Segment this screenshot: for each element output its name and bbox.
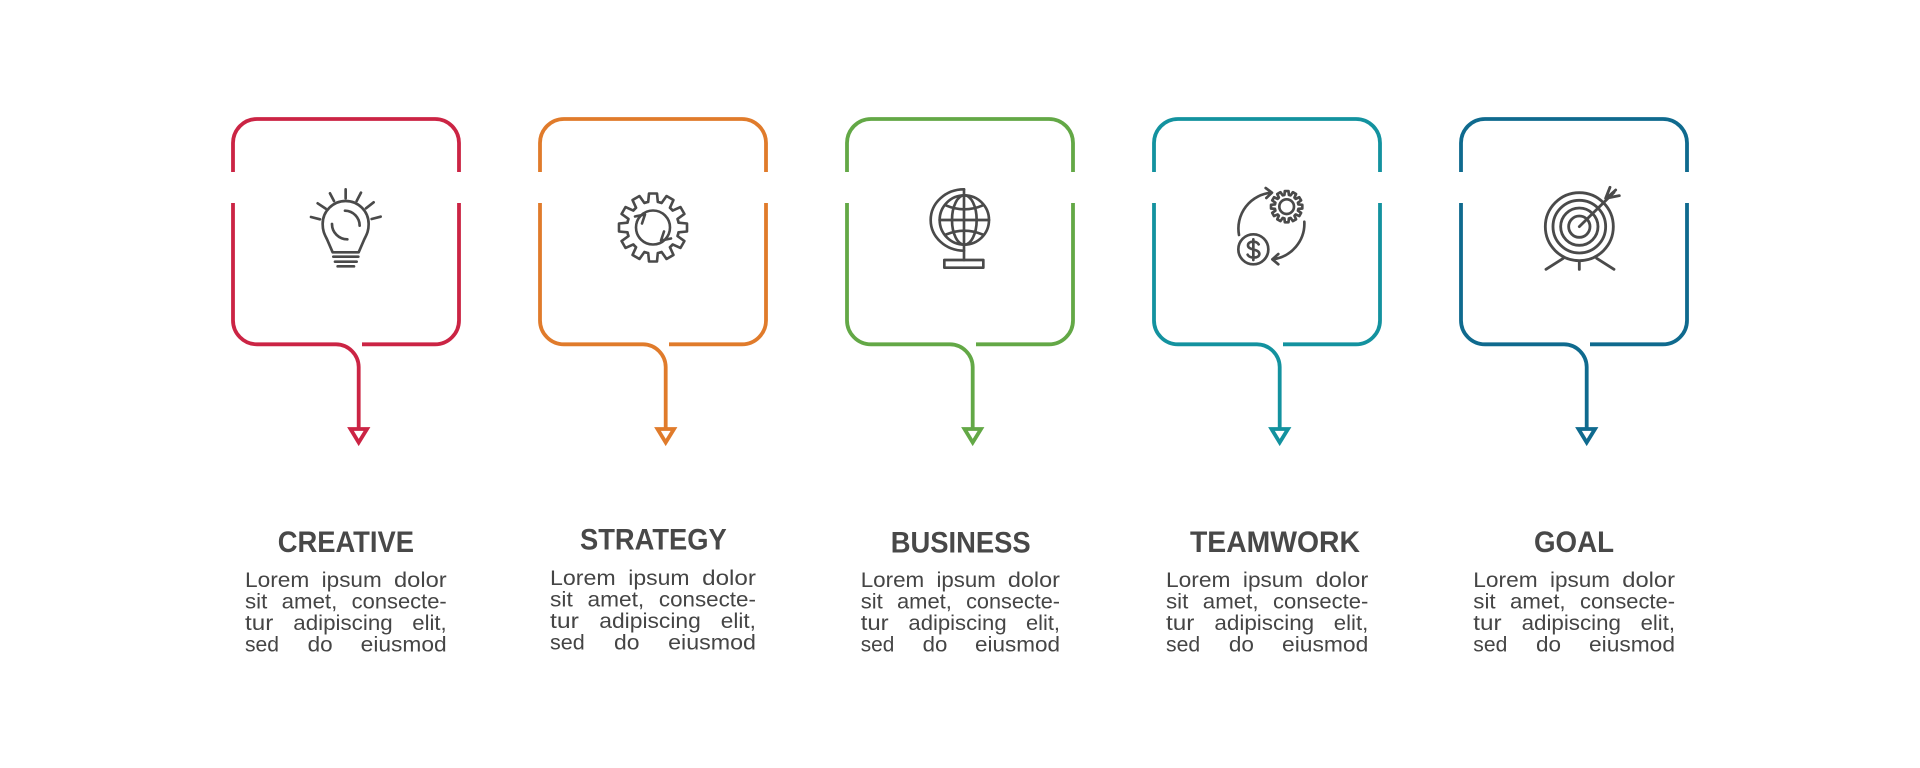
text block: business: ipsum — [936, 569, 996, 592]
text block: teamwork — [1166, 569, 1368, 657]
text block: teamwork: do — [1229, 634, 1254, 657]
text block: teamwork: consecte- — [1273, 591, 1368, 613]
text block: business: Lorem — [861, 569, 924, 592]
text block: goal: eiusmod — [1589, 634, 1675, 657]
text block: creative: dolor — [394, 569, 447, 592]
icon: gear with circular arrows — [619, 194, 687, 262]
text block: strategy: elit, — [721, 610, 756, 633]
text block: goal — [1473, 569, 1675, 657]
text block: business: sit — [861, 590, 883, 614]
text block: strategy: sit — [550, 589, 573, 611]
text block: goal: elit, — [1641, 612, 1675, 635]
panel: teamwork box with arrow — [1154, 119, 1380, 442]
text block: strategy: dolor — [702, 567, 756, 590]
text block: goal: dolor — [1622, 569, 1675, 592]
text block: strategy: Lorem — [550, 567, 616, 590]
text block: business: adipiscing — [908, 612, 1007, 635]
heading: creative: CREATIVE — [278, 526, 414, 559]
heading: goal: GOAL — [1534, 526, 1614, 559]
text block: teamwork: Lorem — [1166, 569, 1230, 592]
text block: creative: sit — [245, 590, 267, 614]
text block: goal: sit — [1473, 590, 1496, 614]
text block: strategy: do — [614, 632, 640, 655]
text block: business — [861, 569, 1060, 657]
icon: money and gear cycle — [1238, 188, 1304, 264]
text block: strategy: sed — [550, 632, 585, 655]
panel: strategy box with arrow — [540, 119, 766, 442]
heading: business: BUSINESS — [891, 526, 1031, 559]
text block: strategy: eiusmod — [668, 632, 756, 655]
text block: business: elit, — [1026, 612, 1060, 635]
text block: creative: amet, — [282, 590, 337, 614]
icon: globe on stand — [931, 189, 989, 268]
text block: goal: sed — [1473, 634, 1507, 657]
text block: strategy: amet, — [587, 589, 644, 611]
text block: creative: eiusmod — [361, 634, 447, 657]
text block: business: consecte- — [966, 590, 1060, 614]
text block: creative: elit, — [412, 612, 447, 635]
text block: creative: adipiscing — [293, 612, 393, 635]
text block: creative — [245, 569, 447, 657]
text block: strategy: tur — [550, 610, 579, 633]
text block: business: dolor — [1008, 569, 1060, 592]
text block: teamwork: sed — [1166, 634, 1200, 657]
icon: light bulb — [311, 189, 381, 266]
text block: strategy — [550, 567, 756, 655]
text block: teamwork: amet, — [1203, 591, 1259, 613]
text block: goal: do — [1536, 634, 1561, 657]
text block: business: eiusmod — [975, 634, 1060, 657]
panel: business box with arrow — [847, 119, 1073, 442]
text block: goal: tur — [1473, 612, 1502, 635]
text block: creative: Lorem — [245, 569, 309, 592]
icon: target with arrow — [1545, 187, 1619, 269]
text block: strategy: consecte- — [659, 589, 756, 611]
text block: teamwork: sit — [1166, 591, 1189, 613]
text block: teamwork: elit, — [1334, 612, 1368, 635]
text block: teamwork: dolor — [1315, 569, 1368, 592]
text block: business: do — [923, 634, 947, 657]
text block: business: amet, — [897, 590, 952, 614]
text block: teamwork: tur — [1166, 612, 1194, 635]
text block: goal: adipiscing — [1522, 612, 1621, 635]
heading: teamwork: TEAMWORK — [1190, 526, 1361, 559]
panel: goal box with arrow — [1461, 119, 1687, 442]
text block: teamwork: ipsum — [1243, 569, 1303, 592]
text block: strategy: adipiscing — [599, 610, 701, 633]
text block: creative: sed — [245, 634, 279, 657]
text block: strategy: ipsum — [628, 567, 690, 590]
panel: creative box with arrow — [233, 119, 459, 442]
text block: creative: tur — [245, 612, 273, 635]
heading: strategy: STRATEGY — [580, 524, 727, 557]
text block: goal: amet, — [1510, 590, 1566, 614]
text block: creative: do — [308, 634, 333, 657]
text block: goal: consecte- — [1580, 590, 1675, 614]
text block: goal: Lorem — [1473, 569, 1538, 592]
text block: creative: ipsum — [322, 569, 382, 592]
text block: business: tur — [861, 612, 889, 635]
text block: goal: ipsum — [1550, 569, 1610, 592]
text block: teamwork: adipiscing — [1214, 612, 1314, 635]
text block: creative: consecte- — [352, 590, 447, 614]
text block: business: sed — [861, 634, 894, 657]
text block: teamwork: eiusmod — [1282, 634, 1368, 657]
